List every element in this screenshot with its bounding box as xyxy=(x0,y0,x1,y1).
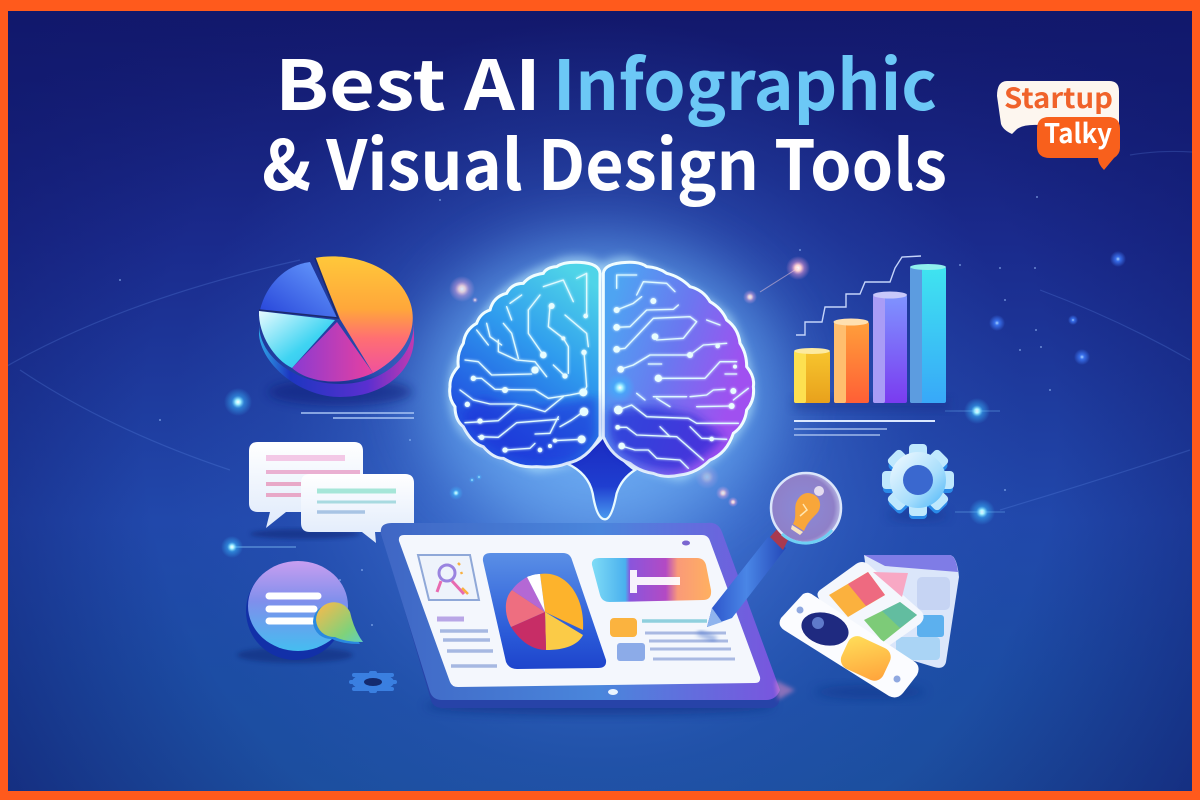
yellow swatch xyxy=(838,633,894,684)
corner highlight xyxy=(775,680,795,700)
pie caption lines xyxy=(301,413,414,418)
orange square xyxy=(610,618,637,637)
gradient button xyxy=(592,558,711,602)
chart caption lines xyxy=(794,420,935,422)
tablet screen xyxy=(399,535,760,687)
tablet body xyxy=(381,523,780,700)
left hemisphere xyxy=(450,262,600,467)
colour palette cards xyxy=(780,555,959,699)
stylus shadow xyxy=(698,632,716,640)
blue square xyxy=(617,643,645,661)
pie slice: magenta xyxy=(292,322,373,382)
circuit nodes xyxy=(465,298,737,453)
bar: orange xyxy=(834,318,869,403)
bar shadow xyxy=(794,398,949,410)
right dark lobe xyxy=(608,407,723,471)
tail bubble xyxy=(313,604,360,644)
bubble: teal lines xyxy=(301,474,414,543)
title xyxy=(262,30,947,210)
speech bubbles xyxy=(249,442,414,543)
left dark lobe xyxy=(463,397,597,462)
home button xyxy=(608,689,618,695)
tablet shadow xyxy=(425,697,775,715)
logo: Startup Talky: Talky xyxy=(1044,112,1112,151)
pie slice: yellow-pink xyxy=(315,256,413,373)
title: & Visual Design Tools xyxy=(262,110,947,210)
stylus xyxy=(707,537,786,627)
brain stem xyxy=(567,437,635,519)
icon: small gear xyxy=(349,671,397,693)
brain glow xyxy=(425,245,775,525)
bar: cyan xyxy=(910,264,946,403)
pie shadow xyxy=(268,378,412,406)
icon: gear xyxy=(882,444,954,521)
bright core xyxy=(605,373,635,403)
tablet xyxy=(381,523,795,715)
tablet base xyxy=(381,530,780,708)
glow at top edge xyxy=(480,522,650,524)
screen text lines left xyxy=(437,619,497,666)
camera dot xyxy=(682,540,690,546)
bubble: pink lines xyxy=(249,442,363,528)
back card xyxy=(864,555,959,668)
glowing particles xyxy=(221,251,1126,558)
pie slice: cyan xyxy=(259,311,335,368)
glowing AI brain xyxy=(450,262,754,519)
stylus and magnifier xyxy=(698,473,841,640)
trend step line xyxy=(796,256,921,335)
right hemisphere xyxy=(603,262,754,476)
magnifier lens xyxy=(771,473,841,543)
top-left 3D pie chart xyxy=(259,256,414,418)
title: Infographic xyxy=(553,30,937,130)
title: Best AI xyxy=(275,30,541,130)
image thumbnail xyxy=(418,555,479,600)
bar: yellow xyxy=(794,348,830,403)
panel pie chart xyxy=(506,574,583,650)
bar: purple xyxy=(873,292,907,403)
magnifier neck xyxy=(770,528,789,550)
brain halo xyxy=(454,262,749,475)
round chat icon xyxy=(237,561,363,663)
front card xyxy=(780,593,919,697)
logo: Startup Talky: Startup xyxy=(1004,77,1113,117)
top-right bar chart xyxy=(794,256,949,435)
logo: Startup Talky xyxy=(997,77,1120,170)
blue pie panel xyxy=(483,553,606,669)
pie depth xyxy=(259,322,414,397)
pie slice: blue xyxy=(260,262,337,318)
circuit lines xyxy=(460,273,748,468)
middle card xyxy=(818,562,924,647)
lightbulb xyxy=(791,493,820,535)
screen text lines right xyxy=(642,621,735,659)
navy swatch xyxy=(798,607,852,651)
